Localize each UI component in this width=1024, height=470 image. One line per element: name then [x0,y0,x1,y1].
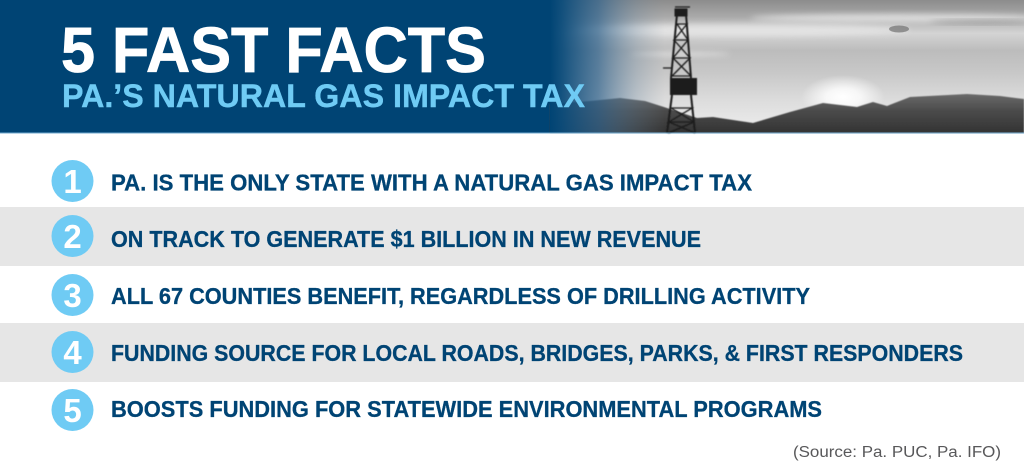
subtitle: PA.’S NATURAL GAS IMPACT TAX [62,78,586,114]
fact 5 [52,389,822,431]
fact 2 [52,215,701,257]
fact 4 [52,331,963,373]
fact 5: 5 [63,392,82,429]
title: 5 FAST FACTS [61,14,486,86]
header banner [0,0,1024,134]
fact 4: 4 [63,334,82,371]
fact 4: FUNDING SOURCE FOR LOCAL ROADS, BRIDGES, PARKS, & FIRST RESPONDERS [111,340,963,366]
fact 2: 2 [63,218,82,255]
fact 3: 3 [63,277,82,314]
fact 1: PA. IS THE ONLY STATE WITH A NATURAL GAS IMPACT TAX [111,170,752,196]
fact 5: BOOSTS FUNDING FOR STATEWIDE ENVIRONMENTAL PROGRAMS [111,396,822,422]
fact 1 [52,160,752,202]
fact 3 [52,274,810,316]
photo: drilling rig at sunset [550,0,1024,133]
fact 3: ALL 67 COUNTIES BENEFIT, REGARDLESS OF DRILLING ACTIVITY [111,283,810,309]
panel: fact rows [0,160,1024,431]
fact 1: 1 [63,163,82,200]
fact 2: ON TRACK TO GENERATE $1 BILLION IN NEW REVENUE [111,226,701,252]
source note: (Source: Pa. PUC, Pa. IFO) [793,444,1001,461]
oil rig tower [663,7,697,133]
